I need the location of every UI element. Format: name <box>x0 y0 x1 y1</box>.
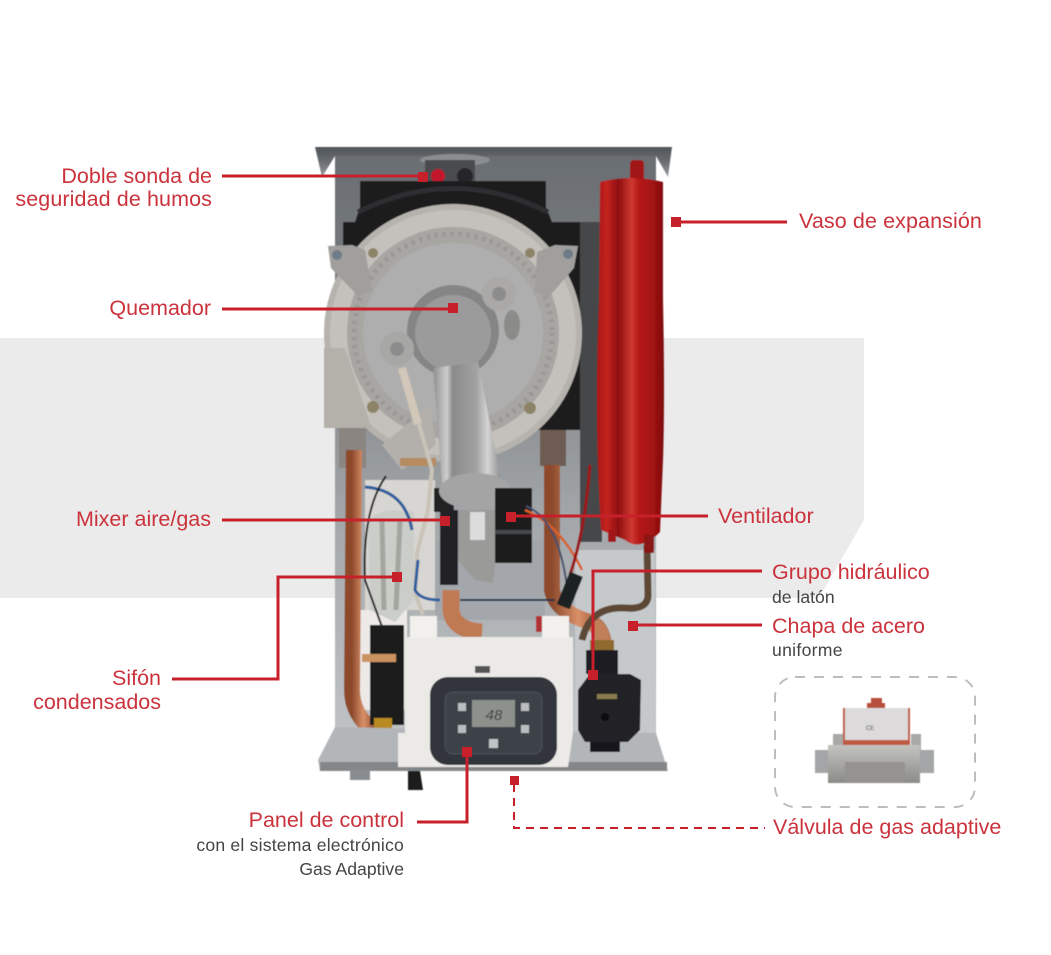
mixer <box>458 510 495 583</box>
icon: gas valve: CE <box>866 726 874 732</box>
right fitting <box>540 430 566 466</box>
white control housing <box>398 637 573 767</box>
wires <box>525 510 582 570</box>
bracket right <box>525 245 578 298</box>
label: fan: Ventilador <box>718 504 814 528</box>
top lid <box>315 147 672 177</box>
fan <box>495 488 532 563</box>
copper coil hint <box>400 458 436 466</box>
left fitting <box>339 428 366 468</box>
bolts on ring <box>367 401 379 413</box>
lower left elbow <box>382 405 436 470</box>
label: burner: Quemador <box>109 296 211 320</box>
label: hydraulic group: Grupo hidráulico <box>772 560 930 584</box>
icon: gas valve <box>815 698 934 783</box>
gas arm <box>433 362 503 494</box>
leader: burner <box>222 303 458 313</box>
yellow valve <box>374 718 392 740</box>
label: expansion vessel: Vaso de expansión <box>799 209 982 233</box>
arm cap <box>439 473 511 509</box>
label: flue probes: seguridad de humos <box>15 187 212 211</box>
left collar <box>434 488 454 512</box>
label: hydraulic group: de latón <box>772 587 835 607</box>
flue sensor block <box>420 154 490 184</box>
label: control panel <box>196 808 404 879</box>
left junction block <box>370 625 404 725</box>
bottom lid <box>318 727 668 771</box>
label: flue probes <box>15 164 212 211</box>
cup of burner <box>407 285 499 377</box>
label: mixer: Mixer aire/gas <box>76 507 211 531</box>
label: siphon: condensados <box>33 690 161 714</box>
drain tap <box>408 771 423 790</box>
blue wire <box>365 487 412 530</box>
burner inner disc <box>363 243 543 423</box>
siphon <box>368 510 414 622</box>
electrode <box>402 368 418 424</box>
left copper pipe <box>352 450 375 732</box>
label: siphon: Sifón <box>112 666 161 690</box>
label: steel sheet: uniforme <box>772 640 843 660</box>
leader: fan <box>506 512 708 522</box>
leader: expansion vessel <box>671 217 787 227</box>
label: steel sheet: Chapa de acero <box>772 614 925 638</box>
leader: control panel <box>417 747 472 822</box>
label: control panel: con el sistema electrónico <box>196 835 404 855</box>
leader: siphon <box>172 572 402 679</box>
display <box>472 700 515 727</box>
leader: flue probes <box>222 172 428 182</box>
control panel <box>430 677 557 765</box>
label: control panel: Gas Adaptive <box>299 859 404 879</box>
right copper pipe <box>552 465 604 650</box>
label: flue probes: Doble sonda de <box>61 164 212 188</box>
burner outer disc <box>324 204 582 462</box>
left side plate <box>324 348 372 430</box>
back panel <box>335 155 656 770</box>
burner lugs <box>380 332 414 366</box>
pump <box>578 640 641 752</box>
leader: mixer <box>222 516 450 526</box>
label: siphon <box>33 666 161 714</box>
control panel: 48 <box>486 707 503 724</box>
label: steel sheet <box>772 614 925 660</box>
connector hose <box>582 545 648 640</box>
leader: steel sheet <box>628 621 762 631</box>
black upper housing <box>343 181 580 430</box>
expansion vessel <box>597 160 664 553</box>
central copper pipe <box>451 590 482 632</box>
bracket left <box>328 245 378 296</box>
label: gas valve: Válvula de gas adaptive <box>773 815 1001 839</box>
boiler photo <box>315 147 672 790</box>
label: control panel: Panel de control <box>249 808 404 832</box>
label: hydraulic group <box>772 560 930 607</box>
background band <box>0 338 864 598</box>
burner ring <box>347 227 559 439</box>
leader: hydraulic group <box>588 571 762 680</box>
valve inset frame <box>775 677 975 807</box>
leader: gas valve <box>510 776 765 828</box>
